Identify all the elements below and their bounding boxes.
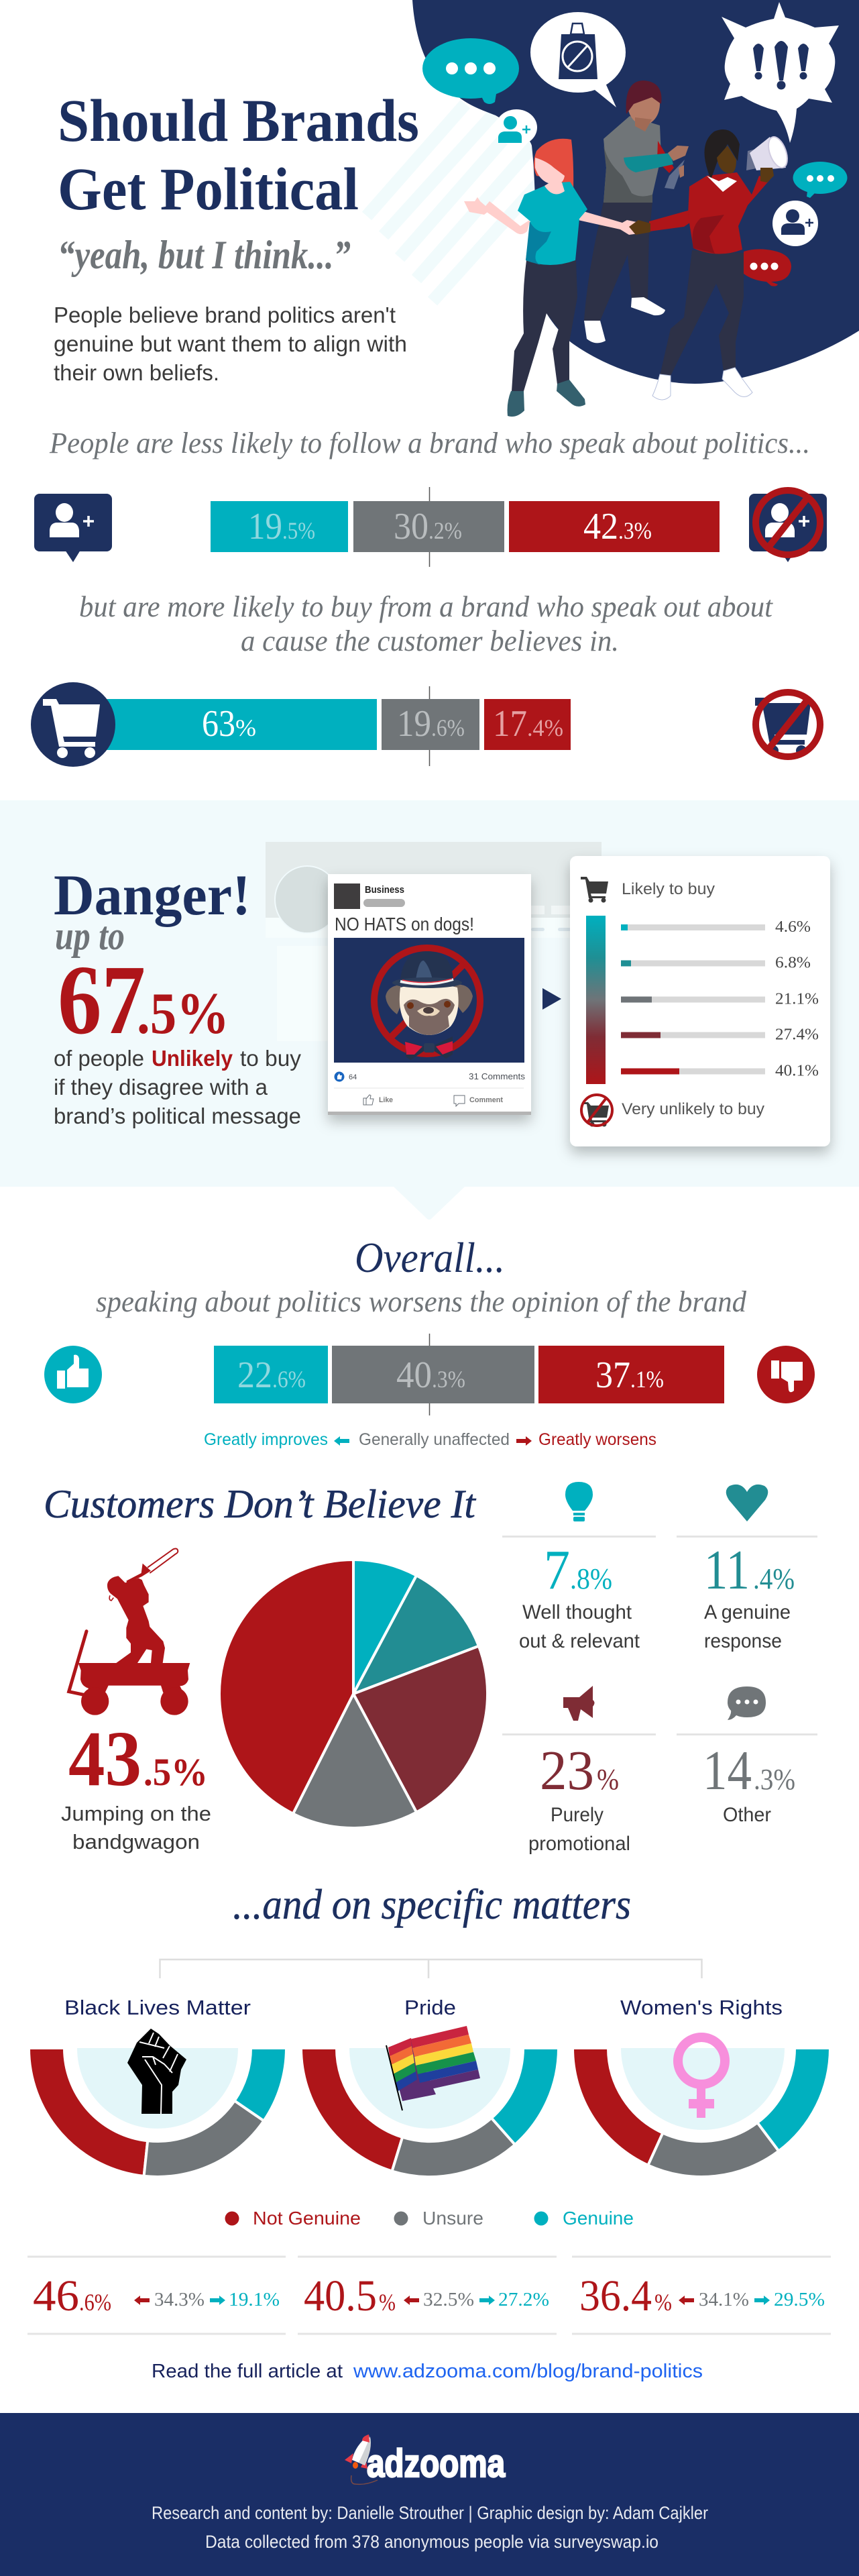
stat: purely promotional: 23	[540, 1739, 594, 1802]
intro text: People believe brand politics aren't	[54, 303, 396, 327]
opinion bar chart: 22	[237, 1354, 272, 1396]
bar 40.1%	[621, 1063, 819, 1080]
title: Should Brands	[58, 88, 419, 154]
up to: up to	[55, 914, 125, 958]
title	[58, 88, 419, 223]
stats: pride	[298, 2255, 557, 2334]
opinion bar chart	[214, 1334, 724, 1415]
logo: adzooma	[345, 2434, 506, 2485]
connector bracket	[160, 1960, 701, 1978]
opinion bar chart: .6%	[272, 1366, 306, 1393]
footer panel	[0, 2413, 859, 2576]
danger body text: brand’s political message	[54, 1104, 301, 1128]
legend: genuine: Unsure	[422, 2208, 483, 2229]
stat: well thought out: out & relevant	[519, 1630, 640, 1652]
follow bar chart	[211, 487, 720, 567]
stats: womens rights: 34.1%	[699, 2290, 749, 2310]
stat: genuine response	[677, 1485, 817, 1652]
credits: Research and content by: Danielle Strouther | Graphic design by: Adam Cajkler	[152, 2503, 708, 2523]
danger body text: Unlikely	[152, 1046, 233, 1071]
stat: well thought out: 7	[544, 1539, 570, 1601]
donut: black lives matter	[29, 1996, 286, 2177]
credits	[152, 2503, 708, 2552]
panel: likelihood to buy: Very unlikely to buy	[622, 1100, 764, 1118]
subheading: buy: but are more likely to buy from a brand who speak out about	[79, 590, 774, 623]
speech bubble: no shopping bag	[530, 12, 626, 107]
stat: purely promotional: promotional	[528, 1833, 630, 1855]
stat: well thought out: .8%	[570, 1562, 612, 1595]
icon: rainbow flag	[386, 2026, 480, 2110]
faded browser backdrop	[266, 842, 602, 1041]
bar 27.4%	[621, 1026, 819, 1044]
article link: www.adzooma.com/blog/brand-politics	[353, 2361, 703, 2382]
stats: womens rights: %	[654, 2289, 672, 2316]
big stat: 67	[58, 945, 146, 1055]
bar 21.1%	[621, 990, 819, 1008]
facebook post card: 31 Comments	[469, 1072, 525, 1081]
article link: Read the full article at	[152, 2361, 343, 2382]
pie chart	[219, 1560, 488, 1828]
subheading: opinion: speaking about politics worsens the opinion of the brand	[96, 1285, 747, 1318]
intro text: their own beliefs.	[54, 360, 219, 385]
facebook post card: Business	[365, 884, 404, 896]
legend: opinion: Generally unaffected	[359, 1430, 510, 1449]
title: Get Political	[58, 156, 359, 223]
panel: likelihood to buy: Likely to buy	[622, 880, 715, 898]
stat: bandwagon: 43	[68, 1715, 141, 1803]
bar 40.1%: 40.1%	[775, 1063, 819, 1080]
donut: womens rights	[573, 1996, 830, 2177]
opinion bar chart: .1%	[630, 1366, 664, 1393]
stat: genuine response: 11	[704, 1539, 750, 1601]
panel: danger	[0, 800, 859, 1220]
stat: genuine response: A genuine	[704, 1601, 791, 1623]
stat: bandwagon: Jumping on the	[61, 1802, 211, 1825]
stat: other: .3%	[754, 1763, 795, 1796]
facebook post card: NO HATS on dogs!	[335, 914, 474, 934]
stats: pride: 40.5	[304, 2271, 377, 2320]
icon: raised fist	[127, 2029, 186, 2114]
opinion bar chart: 40	[396, 1354, 432, 1396]
heading: customers: Customers Don’t Believe It	[44, 1482, 476, 1526]
stat: well thought out	[502, 1482, 656, 1652]
stats: pride: 27.2%	[498, 2290, 549, 2310]
stat: other	[677, 1686, 817, 1826]
donut: black lives matter: Black Lives Matter	[64, 1996, 251, 2019]
person: man with tablet	[584, 80, 689, 343]
stats: pride: %	[379, 2289, 396, 2316]
stats: womens rights: 36.4	[579, 2271, 652, 2320]
icon: lightbulb	[565, 1482, 593, 1521]
facebook post card: Like	[379, 1096, 393, 1104]
heading: specific matters: ...and on specific matters	[233, 1880, 631, 1928]
bar 4.6%: 4.6%	[775, 918, 811, 936]
icon: follow	[34, 494, 112, 562]
follow bar chart: .3%	[618, 517, 652, 544]
icon: do not follow	[749, 490, 827, 562]
icon: chat bubble	[728, 1686, 766, 1720]
facebook post card: 64	[349, 1073, 357, 1081]
speech bubble: exclamation marks	[722, 2, 839, 143]
icon: female symbol	[678, 2037, 725, 2118]
intro text: genuine but want them to align with	[54, 331, 407, 356]
danger heading: Danger!	[54, 863, 251, 927]
legend: genuine: Genuine	[563, 2208, 634, 2229]
stats: black lives matter: 46	[33, 2271, 79, 2320]
legend: genuine	[225, 2208, 634, 2229]
subheading: follow: People are less likely to follow a brand who speak about politics...	[49, 427, 810, 460]
person: woman with teal shirt	[464, 139, 640, 417]
bar 27.4%: 27.4%	[775, 1026, 819, 1044]
speech bubble: follow icon navy	[772, 201, 818, 246]
bar 6.8%: 6.8%	[775, 954, 811, 971]
donut: pride	[301, 1996, 559, 2177]
follow bar chart: .2%	[428, 517, 462, 544]
buy bar chart: 19	[397, 703, 431, 745]
hero illustration background stripes	[367, 104, 547, 301]
hero navy blob	[412, 0, 859, 384]
icon: no cart	[581, 1095, 612, 1127]
danger body text: of people	[54, 1046, 144, 1071]
icon: cart	[31, 682, 115, 767]
icon: cart	[581, 877, 608, 903]
opinion bar chart: .3%	[432, 1366, 465, 1393]
credits: Data collected from 378 anonymous people via surveyswap.io	[205, 2532, 658, 2552]
stats: womens rights: 29.5%	[774, 2290, 825, 2310]
bar 6.8%	[621, 954, 811, 971]
speech bubble: small teal dots	[793, 162, 848, 198]
stat: purely promotional: %	[597, 1763, 619, 1796]
bar 4.6%	[621, 918, 811, 936]
buy bar chart	[101, 686, 571, 766]
stats: pride: 32.5%	[423, 2290, 474, 2310]
buy bar chart: .6%	[431, 714, 465, 741]
icon: thumbs down	[757, 1346, 815, 1403]
big stat	[58, 945, 229, 1055]
bar 21.1%: 21.1%	[775, 990, 819, 1008]
stat: other: 14	[703, 1739, 752, 1802]
icon: megaphone	[563, 1686, 594, 1721]
intro text	[54, 303, 407, 385]
icon: heart	[726, 1485, 768, 1521]
stat: well thought out: Well thought	[522, 1601, 632, 1623]
danger body text: if they disagree with a	[54, 1075, 268, 1099]
icon: no cart	[755, 692, 820, 757]
opinion bar chart: 37	[595, 1354, 630, 1396]
stats: black lives matter	[27, 2255, 286, 2334]
follow bar chart: 19	[248, 506, 282, 547]
image: pug in a hat	[334, 938, 524, 1063]
stat: genuine response: .4%	[753, 1562, 795, 1595]
facebook post card: Comment	[469, 1096, 503, 1104]
subheading: buy	[79, 590, 774, 657]
stats: black lives matter: 34.3%	[154, 2290, 205, 2310]
speech bubble: follow icon teal	[496, 109, 537, 146]
buy bar chart: 63	[202, 703, 235, 745]
follow bar chart: 30	[394, 506, 428, 547]
heading: overall: Overall...	[355, 1234, 505, 1281]
subheading: buy: a cause the customer believes in.	[241, 625, 619, 657]
legend: opinion: Greatly worsens	[538, 1430, 656, 1449]
big stat: .5%	[137, 981, 229, 1046]
stats: black lives matter: .6%	[79, 2289, 111, 2316]
logo: adzooma: adzooma	[367, 2442, 506, 2485]
speech bubble: red dots	[744, 249, 791, 286]
donut: pride: Pride	[404, 1996, 456, 2019]
follow bar chart: .5%	[282, 517, 315, 544]
danger body text: to buy	[240, 1046, 301, 1071]
legend: opinion	[204, 1430, 656, 1449]
stat: bandwagon	[61, 1715, 211, 1854]
speech bubble: teal dots	[422, 38, 519, 104]
panel: likelihood to buy	[570, 856, 830, 1146]
stat: bandwagon: .5%	[144, 1750, 208, 1794]
article link	[152, 2361, 703, 2382]
danger body text	[54, 1046, 301, 1128]
arrow	[542, 988, 561, 1010]
donut: womens rights: Women's Rights	[620, 1996, 783, 2019]
legend: opinion: Greatly improves	[204, 1430, 328, 1449]
stat: purely promotional: Purely	[551, 1804, 604, 1826]
buy bar chart: .4%	[527, 714, 563, 741]
stat: purely promotional	[502, 1686, 656, 1855]
icon: thumbs up	[44, 1346, 102, 1403]
tagline: “yeah, but I think...”	[58, 233, 351, 277]
person: woman with megaphone	[629, 129, 791, 400]
follow bar chart: 42	[583, 506, 618, 547]
stats: womens rights	[572, 2255, 831, 2334]
buy bar chart: 17	[493, 703, 527, 745]
stat: other: Other	[723, 1804, 771, 1826]
icon: wagon and trombone player	[69, 1549, 190, 1715]
stat: genuine response: response	[704, 1630, 782, 1652]
facebook post card	[328, 874, 531, 1115]
stat: bandwagon: bandgwagon	[72, 1830, 200, 1854]
stats: black lives matter: 19.1%	[229, 2290, 280, 2310]
buy bar chart: %	[235, 714, 256, 741]
legend: genuine: Not Genuine	[253, 2208, 361, 2229]
